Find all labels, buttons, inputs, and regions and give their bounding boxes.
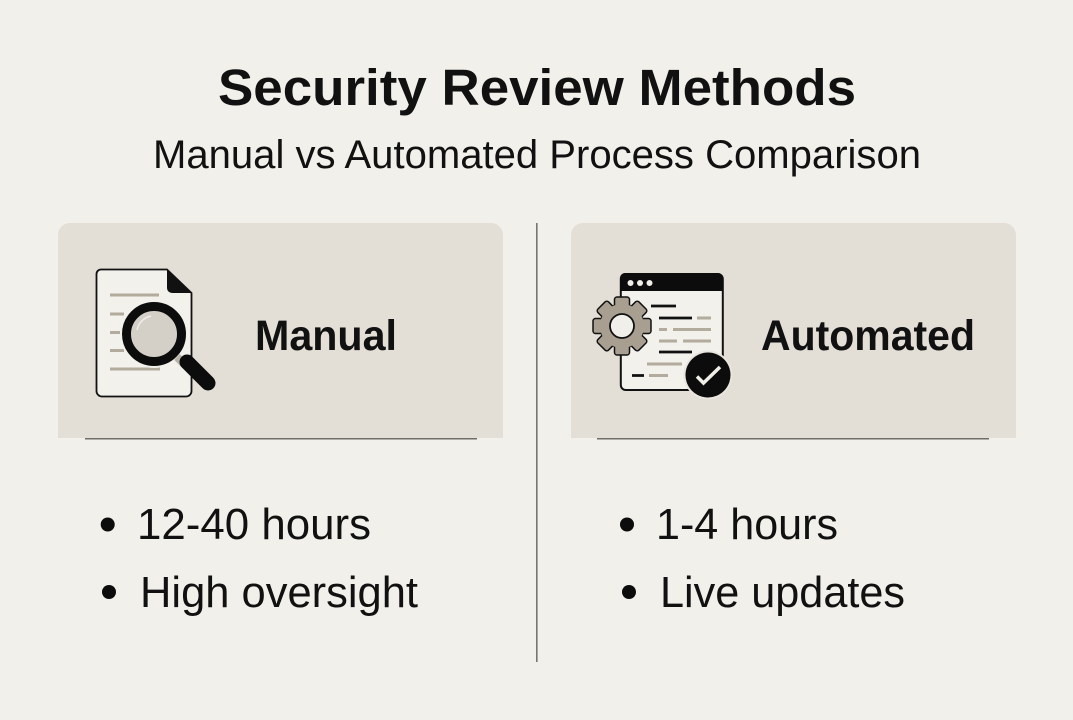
- automated header rule: [597, 438, 989, 440]
- manual header rule: [85, 438, 477, 440]
- automated label: Automated: [761, 312, 975, 360]
- subtitle: Manual vs Automated Process Comparison: [153, 133, 921, 177]
- bullet: Live updates: Live updates: [660, 568, 905, 617]
- icon: document with magnifying glass: [96, 269, 208, 396]
- bullet: 12-40 hours: 12-40 hours: [137, 500, 371, 549]
- panel: manual: [58, 223, 503, 440]
- automated bullet list: [620, 500, 905, 617]
- manual label: Manual: [255, 312, 397, 360]
- manual header background: [58, 223, 503, 438]
- bullet: High oversight: High oversight: [140, 568, 418, 617]
- bullet: 1-4 hours: 1-4 hours: [656, 500, 838, 549]
- manual bullet list: [101, 500, 418, 617]
- icon: window with gear and check: [593, 273, 732, 400]
- center divider: [536, 223, 538, 662]
- panel: automated: [571, 223, 1016, 440]
- automated header background: [571, 223, 1016, 438]
- title: Security Review Methods: [218, 59, 856, 116]
